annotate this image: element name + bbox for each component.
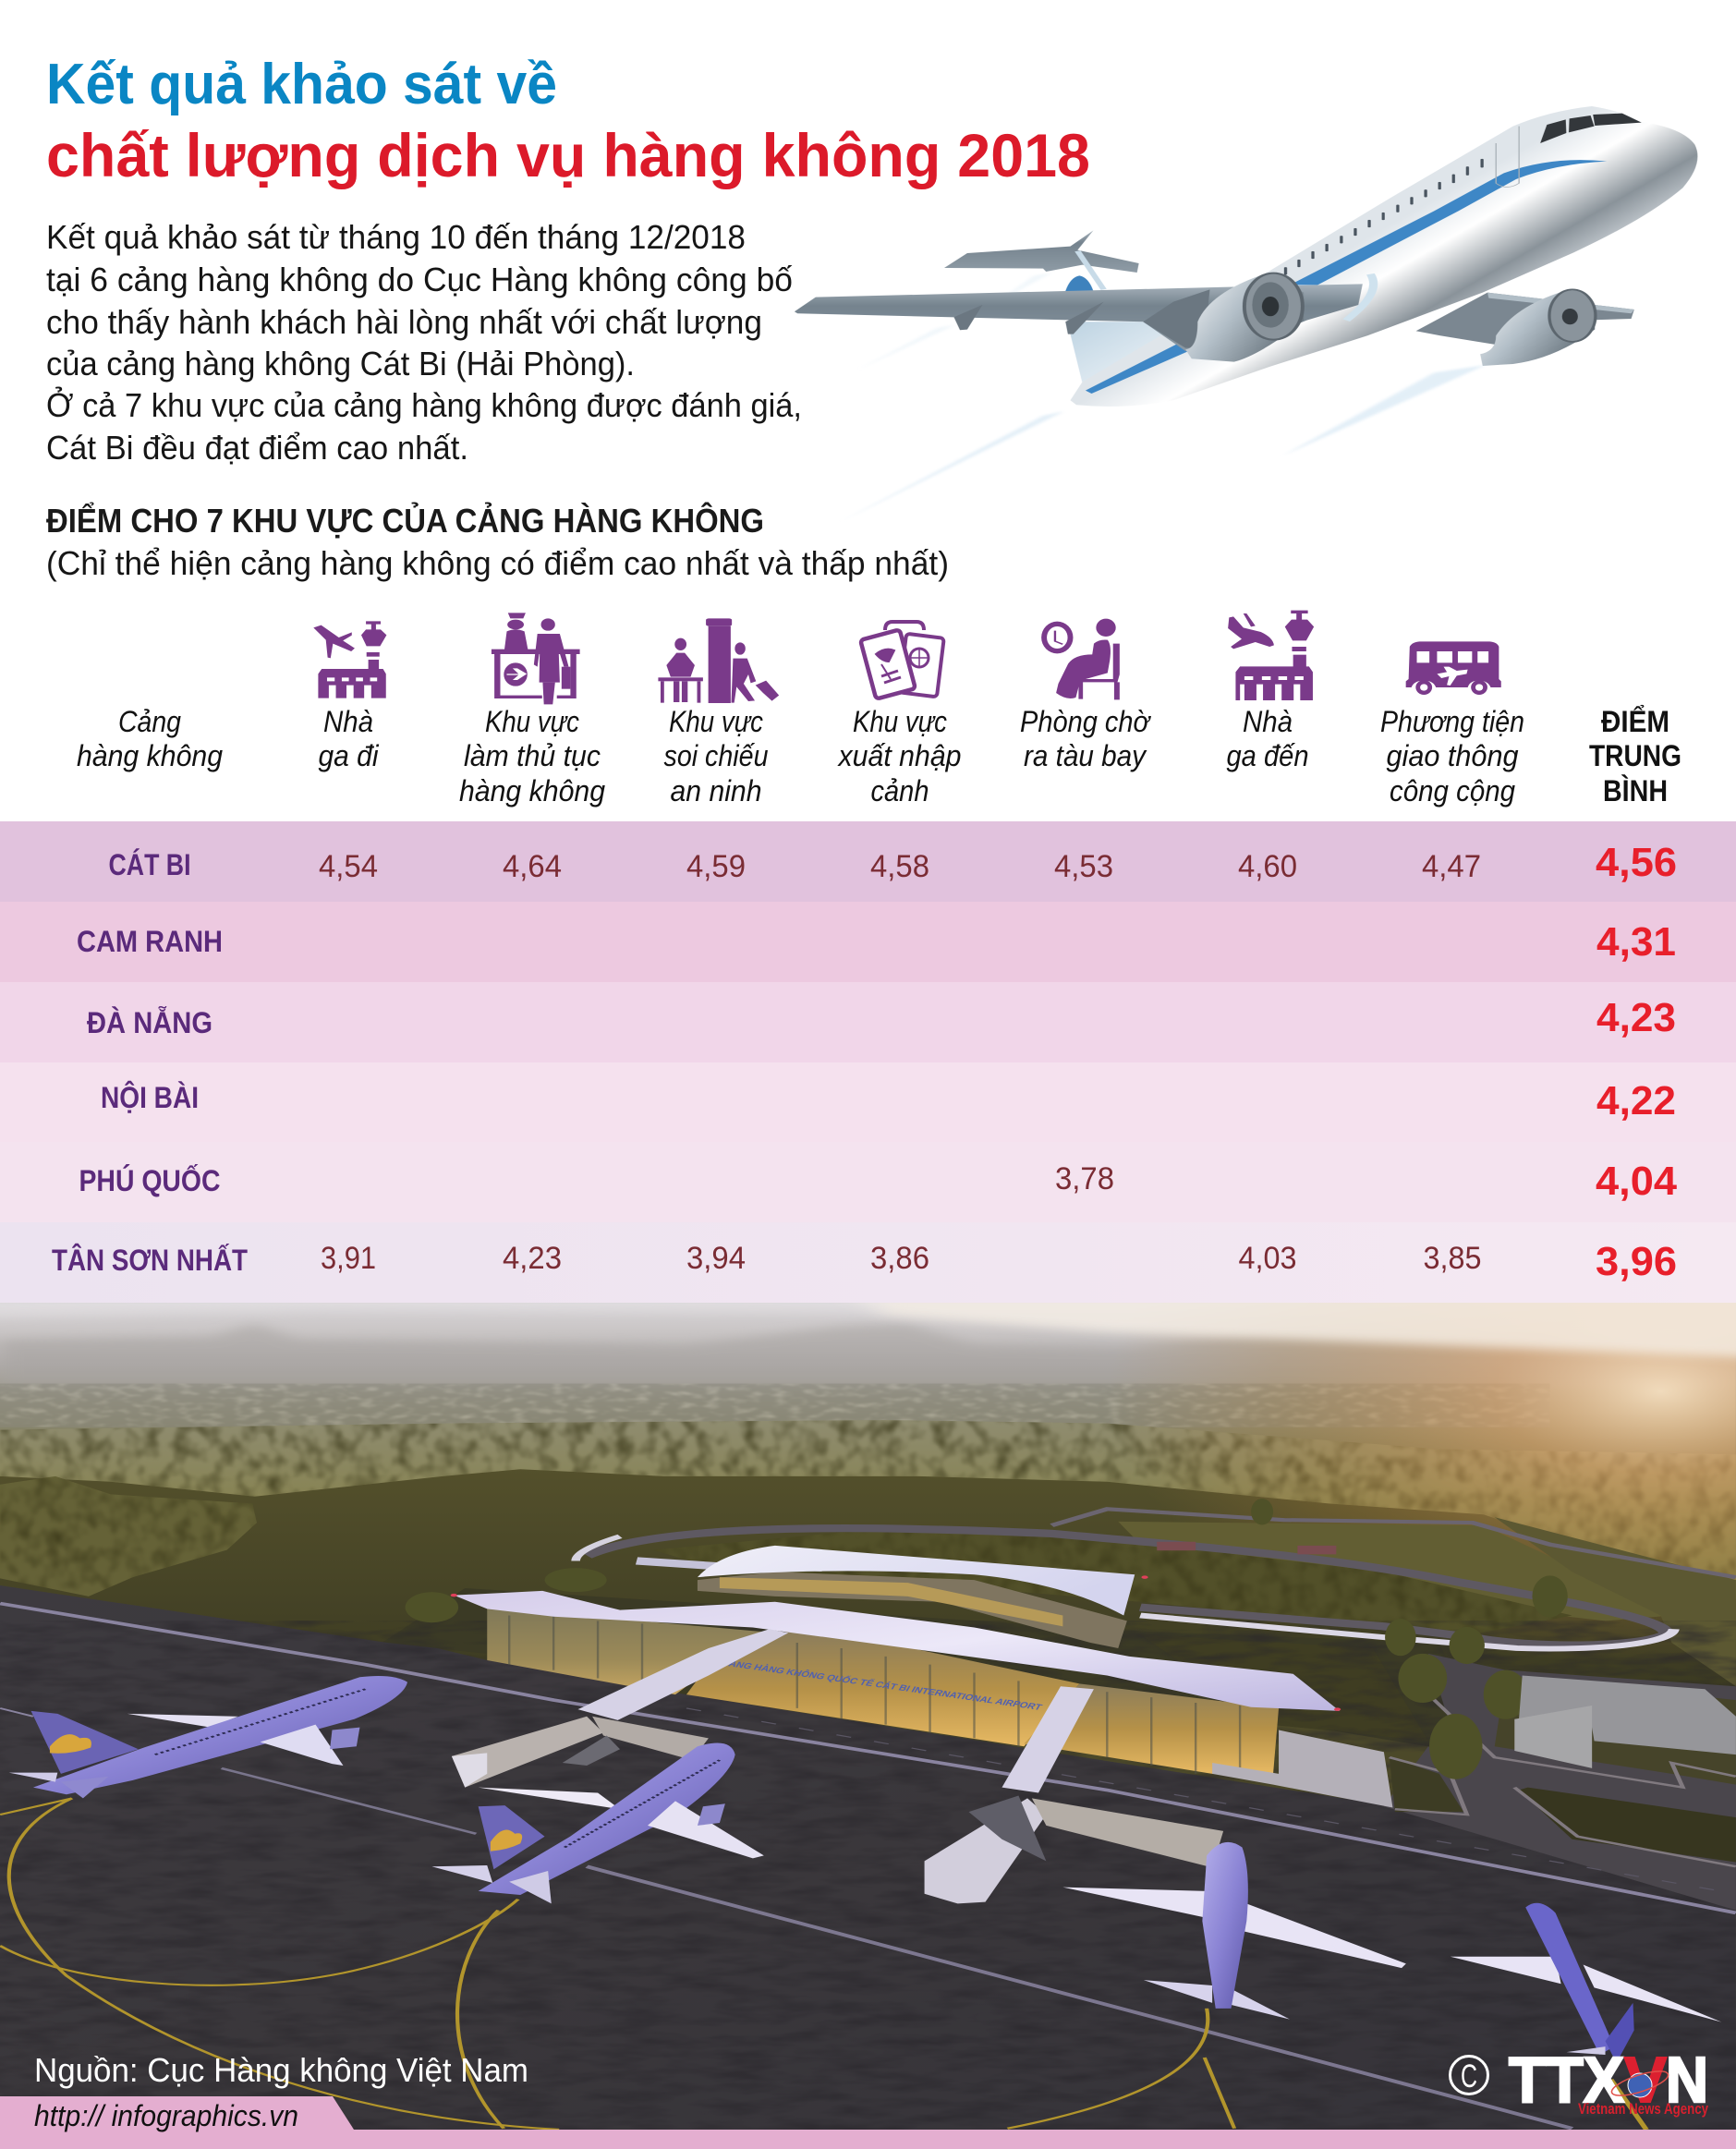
row: Da Nang: ĐÀ NẴNG — [87, 1006, 212, 1039]
tarmac — [0, 1585, 1736, 2130]
icon: airport bus — [1406, 641, 1501, 695]
header: security: an ninh — [671, 774, 761, 807]
table heading — [46, 501, 949, 582]
row: Tan Son Nhat: 4,23 — [503, 1241, 562, 1276]
row: Tan Son Nhat: 3,96 — [1596, 1239, 1677, 1284]
header: transport: Phương tiện — [1380, 705, 1524, 738]
logo: TTXVN: N — [1666, 2044, 1708, 2116]
intro text block: Ở cả 7 khu vực của cảng hàng không được đánh giá, — [46, 385, 802, 424]
header: transport — [1380, 705, 1524, 807]
header: arrivals — [1227, 705, 1308, 772]
header: arrivals: Nhà — [1243, 705, 1293, 738]
row: Cát Bi: 4,47 — [1422, 849, 1481, 884]
header: average — [1589, 705, 1681, 807]
sky and haze — [0, 1303, 1736, 1454]
icon: check-in desk — [492, 613, 580, 704]
engine far — [1480, 289, 1596, 366]
building sign: CẢNG HÀNG KHÔNG QUỐC TẾ CÁT BI INTERNATIONAL AIRPORT — [719, 1657, 1045, 1712]
table rows — [0, 821, 1736, 1303]
header: security: soi chiếu — [663, 739, 769, 772]
bright sky — [861, 1303, 1736, 1362]
intro text block: của cảng hàng không Cát Bi (Hải Phòng). — [46, 345, 635, 382]
row: Da Nang: 4,23 — [1596, 995, 1676, 1040]
header: waiting: ra tàu bay — [1024, 739, 1147, 772]
table heading: (Chỉ thể hiện cảng hàng không có điểm cao nhất và thấp nhất) — [46, 544, 949, 582]
row: Phu Quoc: 3,78 — [1055, 1161, 1114, 1196]
row: Phu Quoc — [0, 1142, 1736, 1222]
main roof — [454, 1591, 1340, 1711]
base ground — [189, 1303, 1736, 2130]
header: arrivals: ga đến — [1227, 739, 1308, 772]
row: Cam Ranh: 4,31 — [1596, 919, 1676, 965]
row: Cát Bi: 4,56 — [1596, 840, 1677, 885]
left glass — [487, 1608, 764, 1694]
title line 1: Kết quả khảo sát về — [46, 53, 557, 116]
near wing — [795, 284, 1363, 358]
logo: TTXVN — [1451, 2044, 1708, 2118]
row: Cát Bi: 4,60 — [1238, 849, 1297, 884]
tree bands — [0, 1420, 1736, 1580]
aircraft 2 — [431, 1743, 764, 1903]
centre glass — [686, 1632, 1079, 1746]
row: Cát Bi: 4,53 — [1054, 849, 1113, 884]
row: Cát Bi — [0, 821, 1736, 902]
title — [46, 53, 1090, 189]
header: waiting — [1020, 705, 1151, 772]
icon: security screening — [658, 618, 779, 703]
sun glow — [1162, 1303, 1736, 1644]
cheatline stripe — [1290, 160, 1607, 285]
url tab: http:// infographics.vn — [34, 2099, 298, 2132]
far wing — [1416, 293, 1634, 346]
header: check-in: hàng không — [459, 774, 605, 807]
fuselage — [1070, 106, 1697, 407]
intro text block: Kết quả khảo sát từ tháng 10 đến tháng 12/2018 — [46, 218, 746, 256]
cockpit windows — [1540, 114, 1642, 143]
row: Tan Son Nhat: 4,03 — [1238, 1241, 1297, 1276]
intro text block: Cát Bi đều đạt điểm cao nhất. — [46, 429, 468, 467]
header: port: Cảng — [118, 705, 181, 738]
row: Tan Son Nhat: 3,94 — [686, 1241, 746, 1276]
header: average: TRUNG — [1589, 739, 1681, 772]
grey buildings — [1514, 1675, 1736, 1768]
row: Cát Bi: CÁT BI — [109, 848, 190, 881]
aircraft 4 — [1451, 1903, 1721, 2063]
bottom bar — [0, 2130, 1736, 2149]
service block — [1212, 1730, 1392, 1807]
header: transport: giao thông — [1386, 739, 1519, 772]
header: port — [77, 705, 223, 772]
right glass — [1024, 1683, 1279, 1774]
blue tail base — [1065, 275, 1093, 291]
mountains — [6, 1323, 1352, 1356]
icon: waiting room — [1041, 619, 1120, 699]
row: Noi Bai: 4,22 — [1596, 1078, 1676, 1123]
copyright mark — [1451, 2057, 1487, 2094]
copyright mark: C — [1461, 2058, 1477, 2094]
row: Da Nang — [0, 982, 1736, 1062]
header: average: ĐIỂM — [1601, 705, 1669, 738]
header: check-in: làm thủ tục — [464, 739, 601, 772]
header: immigration: xuất nhập — [837, 739, 961, 772]
aircraft 3 — [1062, 1842, 1406, 2020]
header: immigration: Khu vực — [853, 705, 947, 738]
header: departures — [318, 705, 379, 772]
doors — [1496, 127, 1519, 187]
row: Cam Ranh — [0, 902, 1736, 982]
row: Tan Son Nhat: 3,85 — [1423, 1241, 1482, 1276]
row: Cát Bi: 4,59 — [686, 849, 746, 884]
header: immigration — [837, 705, 961, 807]
jet bridge 2 — [925, 1686, 1223, 1903]
town — [0, 1383, 1550, 1427]
elevated road loop — [576, 1509, 1736, 1649]
vertical fin — [1067, 322, 1185, 383]
lawn behind terminal — [671, 1536, 1572, 1632]
cabin windows — [1285, 160, 1482, 274]
roadside trees — [406, 1499, 1568, 1779]
intro text block — [46, 218, 802, 467]
row: Noi Bai: NỘI BÀI — [101, 1081, 199, 1114]
buses — [1157, 1542, 1336, 1554]
row: Cát Bi: 4,54 — [319, 849, 378, 884]
row: Noi Bai — [0, 1062, 1736, 1142]
green patches — [1519, 1788, 1736, 1863]
header: security — [663, 705, 769, 807]
horizontal stabiliser — [944, 230, 1139, 273]
source note: Nguồn: Cục Hàng không Việt Nam — [34, 2051, 528, 2089]
header: immigration: cảnh — [870, 774, 929, 807]
header: check-in: Khu vực — [485, 705, 579, 738]
icon: arrivals terminal — [1228, 611, 1314, 700]
header: security: Khu vực — [669, 705, 763, 738]
row: Cát Bi: 4,58 — [870, 849, 929, 884]
table heading: ĐIỂM CHO 7 KHU VỰC CỦA CẢNG HÀNG KHÔNG — [46, 501, 764, 540]
header: departures: ga đi — [318, 739, 379, 772]
logo: TTXVN: V — [1624, 2044, 1667, 2116]
row: Tan Son Nhat: TÂN SƠN NHẤT — [52, 1244, 248, 1277]
row: Tan Son Nhat — [0, 1222, 1736, 1303]
header: transport: công cộng — [1390, 774, 1515, 807]
intro text block: cho thấy hành khách hài lòng nhất với chất lượng — [46, 303, 762, 341]
lawn inside loop — [1118, 1522, 1671, 1621]
header: departures: Nhà — [323, 705, 373, 738]
lawn right of loop — [1495, 1517, 1736, 1686]
title line 2: chất lượng dịch vụ hàng không 2018 — [46, 121, 1090, 189]
row: Phu Quoc: 4,04 — [1596, 1159, 1678, 1204]
top haze — [0, 1303, 859, 1312]
left forest — [0, 1476, 257, 1597]
jet bridge 1 — [452, 1629, 788, 1788]
icon: departures terminal — [313, 621, 386, 698]
airport illustration — [0, 1261, 1736, 2130]
illustration: airplane — [795, 106, 1697, 522]
yellow guide lines — [0, 1798, 1646, 2130]
rear roof — [698, 1546, 1135, 1616]
header: average: BÌNH — [1603, 774, 1668, 807]
kerb lines — [1390, 1683, 1736, 1866]
row: Cát Bi: 4,64 — [503, 849, 562, 884]
lawn in front — [382, 1588, 1484, 1746]
right road field — [1384, 1654, 1736, 1910]
aircraft 1 — [9, 1676, 407, 1798]
lawn — [0, 1457, 1736, 1708]
taxi lines — [0, 1604, 1736, 2129]
row: Cam Ranh: CAM RANH — [77, 925, 223, 958]
header: port: hàng không — [77, 739, 223, 772]
intro text block: tại 6 cảng hàng không do Cục Hàng không công bố — [46, 261, 793, 298]
contrails — [840, 273, 1486, 522]
rear glass hall — [698, 1572, 1127, 1648]
header: waiting: Phòng chờ — [1020, 705, 1151, 738]
row: Tan Son Nhat: 3,86 — [870, 1241, 929, 1276]
row: Tan Son Nhat: 3,91 — [321, 1241, 376, 1276]
icon: passports — [860, 622, 944, 699]
tarmac texture — [0, 1621, 1736, 2130]
row: Phu Quoc: PHÚ QUỐC — [79, 1164, 220, 1197]
header: check-in — [459, 705, 605, 807]
engine near — [1185, 273, 1304, 362]
logo: TTXVN: TTX — [1509, 2044, 1624, 2116]
terminal — [451, 1546, 1392, 1807]
column headers — [77, 705, 1681, 807]
